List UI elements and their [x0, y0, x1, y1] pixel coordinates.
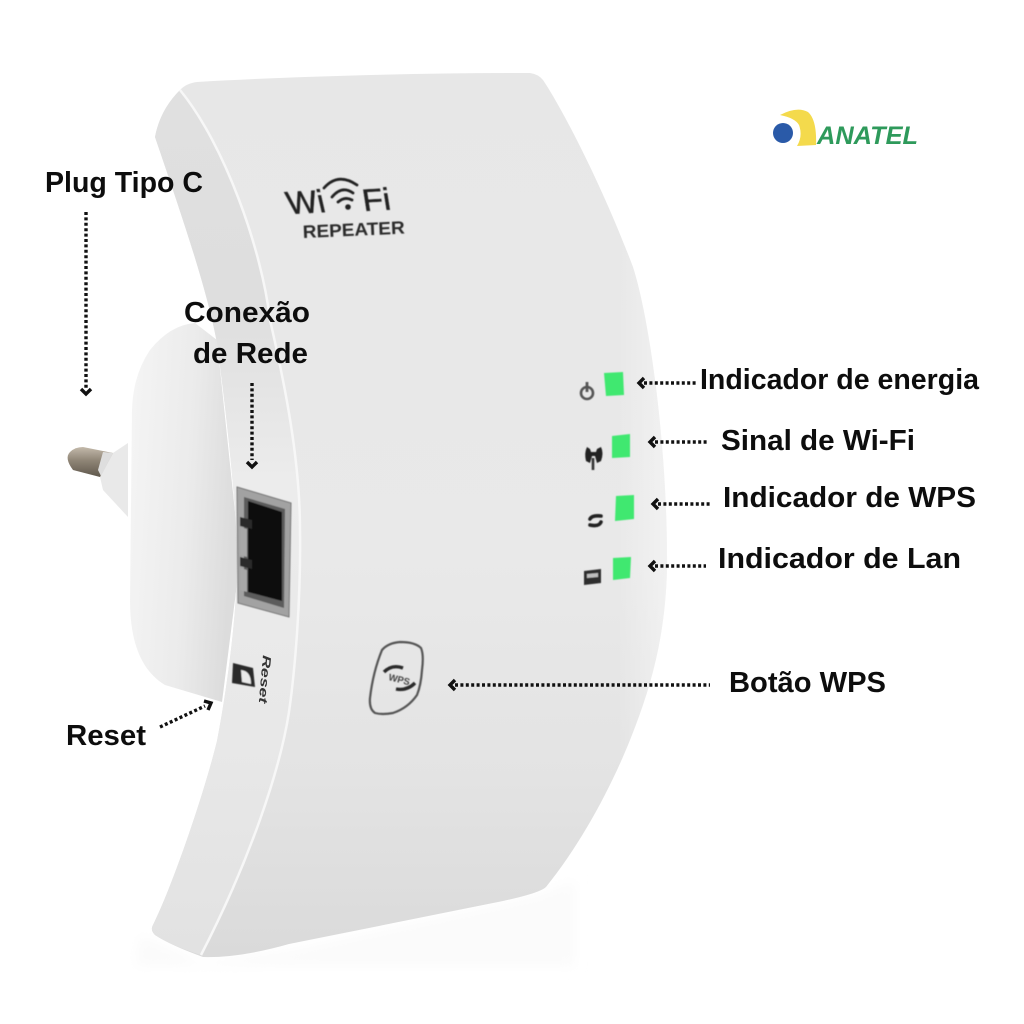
wps button [370, 642, 423, 714]
ethernet port [237, 487, 291, 617]
arrow: energia [639, 378, 696, 388]
wifi icon [324, 179, 357, 210]
arrow: lan [650, 561, 706, 571]
led: lan [584, 557, 631, 585]
label: indicador de lan: Indicador de Lan [718, 543, 961, 575]
label: plug tipo c: Plug Tipo C [45, 167, 203, 199]
label: indicador de energia: Indicador de energia [700, 364, 980, 396]
side panel [152, 90, 300, 955]
led: wifi [585, 434, 630, 470]
device: wifi repeater [68, 73, 667, 957]
floor shadow [135, 880, 575, 966]
logo: wi-fi repeater: Wi [282, 184, 329, 221]
led: power [581, 372, 624, 399]
label: conexao de rede [184, 297, 310, 370]
label: reset: Reset [66, 720, 146, 752]
main body [152, 73, 667, 957]
label: botao wps: Botão WPS [729, 667, 886, 699]
logo: wi-fi repeater: REPEATER [302, 218, 405, 242]
label: conexao de rede: Conexão [184, 297, 310, 329]
logo: wi-fi repeater [282, 179, 405, 242]
arrow: reset [160, 701, 211, 727]
arrow: plug [81, 212, 91, 394]
anatel logo [773, 110, 918, 150]
reset button [232, 663, 255, 687]
plug pin [68, 443, 128, 517]
anatel logo: ANATEL [816, 122, 918, 150]
right edge glow [420, 73, 667, 887]
reset print: Reset [256, 655, 274, 705]
label: indicador de wps: Indicador de WPS [723, 482, 976, 514]
arrow: wifi [650, 437, 708, 447]
led: wps [590, 495, 634, 526]
arrow: rede [247, 383, 257, 467]
label: sinal de wi-fi: Sinal de Wi-Fi [721, 425, 915, 457]
arrow: wps [653, 499, 710, 509]
logo: wi-fi repeater: Fi [360, 182, 393, 218]
wps button: WPS [387, 672, 411, 688]
arrow: botao [450, 680, 710, 690]
label: conexao de rede: de Rede [193, 338, 308, 370]
plug housing [130, 323, 240, 702]
